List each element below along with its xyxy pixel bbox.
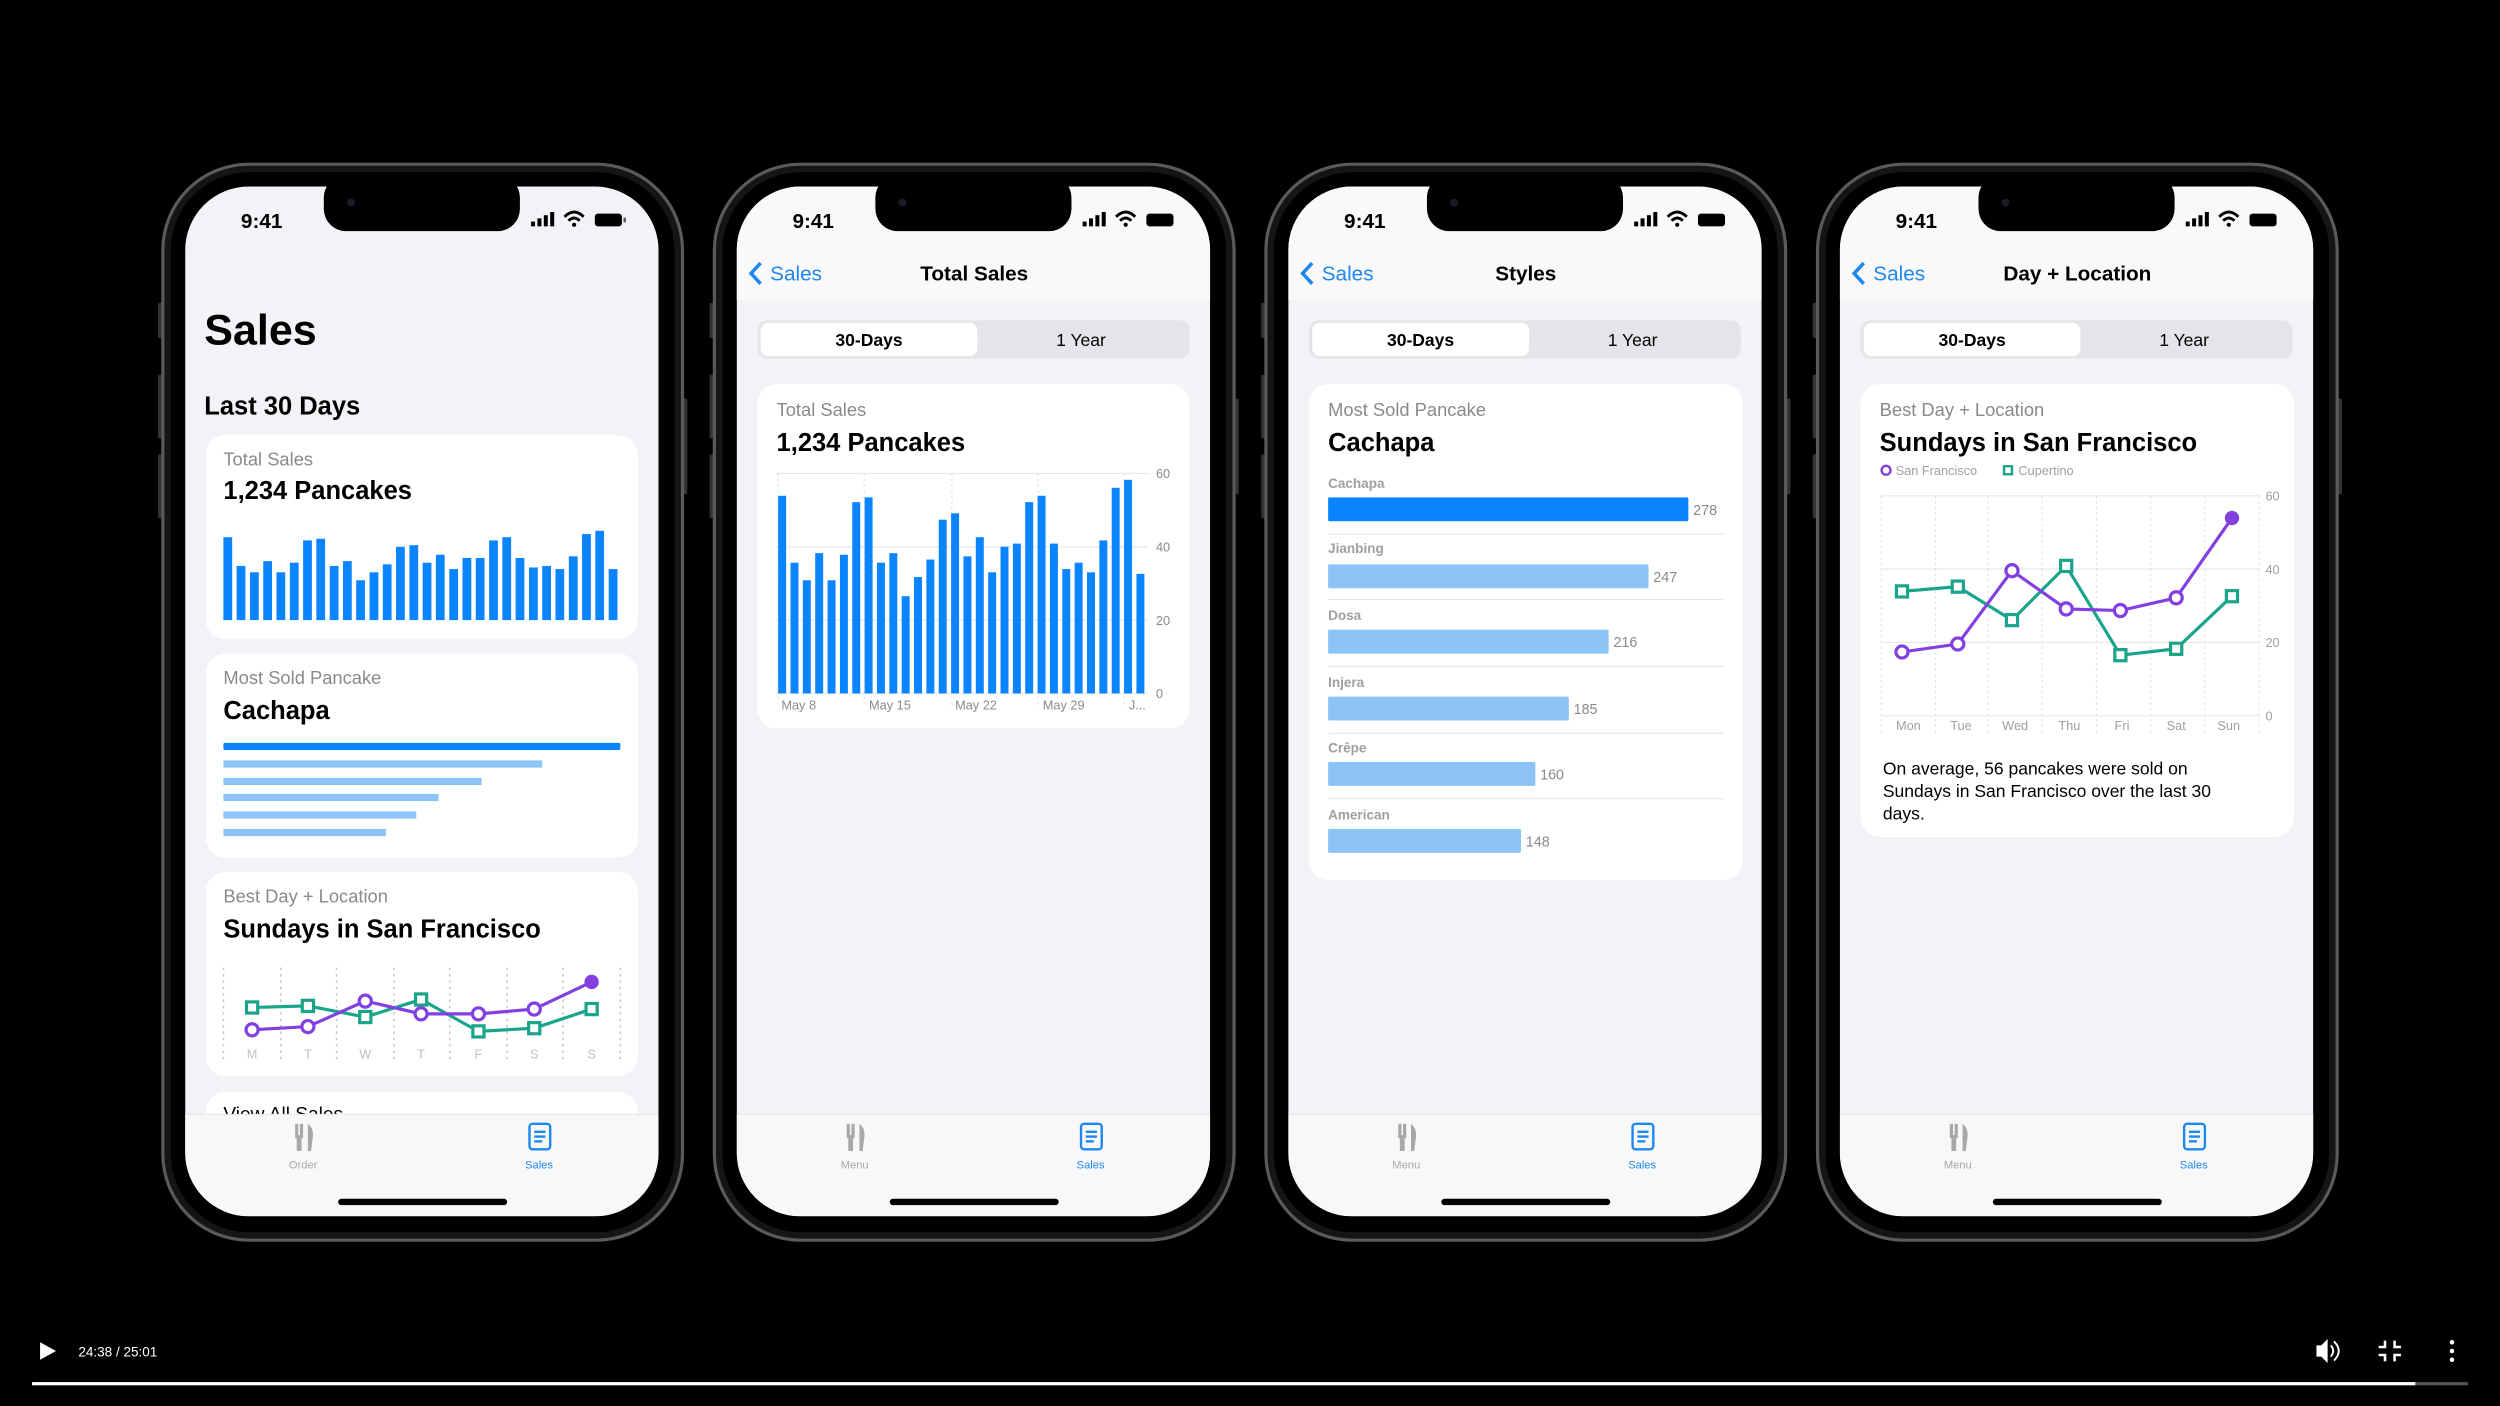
segmented control xyxy=(1861,320,2293,359)
bar chart: daily sales: 40 xyxy=(1156,540,1170,555)
legend xyxy=(1880,464,2073,478)
line chart mini xyxy=(223,968,620,1063)
line chart mini: F xyxy=(475,1046,483,1061)
nav bar: Sales xyxy=(1873,263,1925,286)
summary text xyxy=(1883,759,2211,823)
bar chart: daily sales: May 29 xyxy=(1043,697,1085,712)
segmented control: 30-Days xyxy=(835,330,903,350)
bar chart: daily sales: 20 xyxy=(1156,613,1170,628)
icon: exit fullscreen xyxy=(2379,1341,2401,1361)
status bar xyxy=(793,210,1174,228)
summary text: Sundays in San Francisco over the last 30 xyxy=(1883,781,2211,801)
phone 3: styles detail xyxy=(1261,164,1790,1240)
nav bar: Day + Location xyxy=(2003,263,2151,286)
nav bar xyxy=(1854,263,2151,286)
line chart: sales by day and location: 40 xyxy=(2265,562,2280,577)
tab bar xyxy=(1840,1114,2313,1216)
card: best day + location xyxy=(1861,384,2294,837)
summary text: days. xyxy=(1883,803,1925,823)
line chart mini: W xyxy=(359,1046,371,1061)
icon: play xyxy=(40,1342,56,1360)
tab bar: Sales xyxy=(525,1159,553,1171)
horizontal bar chart: styles: Cachapa xyxy=(1328,476,1385,491)
status bar xyxy=(1896,210,2277,228)
horizontal bar chart: styles: American xyxy=(1328,807,1390,822)
horizontal bar chart: styles: Injera xyxy=(1328,675,1365,690)
horizontal bar chart: styles: Dosa xyxy=(1328,608,1362,623)
line chart: sales by day and location: 20 xyxy=(2265,635,2280,650)
tab bar xyxy=(1288,1114,1762,1216)
bar chart: daily sales: J... xyxy=(1129,697,1146,712)
line chart mini: M xyxy=(247,1046,257,1061)
line chart: sales by day and location: Wed xyxy=(2002,718,2028,733)
segmented control: 1 Year xyxy=(1608,330,1658,350)
bar chart: daily sales xyxy=(777,466,1170,712)
bar chart: daily sales: May 15 xyxy=(869,697,911,712)
card: most sold pancake xyxy=(206,654,638,858)
status bar xyxy=(242,210,626,228)
card: most sold pancake styles xyxy=(1309,384,1743,880)
line chart: sales by day and location: Fri xyxy=(2115,718,2129,733)
horizontal bar chart: styles: 185 xyxy=(1574,702,1598,718)
tab bar: Menu xyxy=(1944,1159,1972,1171)
horizontal bar chart: styles: 160 xyxy=(1540,768,1564,784)
horizontal bar chart: styles: 148 xyxy=(1526,834,1550,850)
card: view all sales (cut off): View All Sales xyxy=(223,1105,343,1126)
icon: volume xyxy=(2316,1339,2339,1363)
horizontal bar chart: styles: Crêpe xyxy=(1328,740,1367,755)
phone 2: total sales detail xyxy=(710,164,1239,1240)
card: total sales chart: 1,234 Pancakes xyxy=(777,429,965,457)
card: view all sales (cut off) xyxy=(206,1092,638,1114)
card: total sales: 1,234 Pancakes xyxy=(223,477,412,505)
horizontal bar chart: styles: 247 xyxy=(1653,570,1677,586)
bar chart: daily sales: 0 xyxy=(1156,686,1163,701)
bar chart: daily sales: May 22 xyxy=(955,697,997,712)
phone 1: sales overview xyxy=(158,164,687,1240)
card: most sold pancake: Cachapa xyxy=(223,697,331,725)
bar chart: daily sales: May 8 xyxy=(781,697,816,712)
card: total sales chart xyxy=(757,384,1189,729)
segmented control: 1 Year xyxy=(2159,330,2209,350)
status bar: 9:41 xyxy=(1896,210,1937,233)
line chart mini: T xyxy=(304,1046,312,1061)
card: total sales xyxy=(206,435,638,639)
status bar: 9:41 xyxy=(241,210,282,233)
status bar xyxy=(1344,210,1726,228)
video controls xyxy=(32,1339,2468,1385)
nav bar: Styles xyxy=(1495,263,1556,286)
segmented control xyxy=(1309,320,1741,359)
nav bar: Sales xyxy=(1322,263,1374,286)
line chart: sales by day and location: 0 xyxy=(2265,709,2273,724)
icon: more menu xyxy=(2450,1340,2454,1362)
card: best day + location xyxy=(206,872,638,1076)
horizontal bar chart: styles: 278 xyxy=(1693,503,1717,519)
nav bar xyxy=(751,263,1028,286)
progress bar xyxy=(32,1382,2468,1385)
segmented control: 30-Days xyxy=(1939,330,2006,350)
card: best day + location: Best Day + Location xyxy=(223,885,388,906)
card: total sales chart: Total Sales xyxy=(777,399,866,420)
line chart: sales by day and location xyxy=(1881,489,2280,733)
card: best day + location: Best Day + Location xyxy=(1880,399,2044,420)
card: most sold pancake: Most Sold Pancake xyxy=(223,667,381,688)
tab bar: Order xyxy=(289,1159,318,1171)
line chart: sales by day and location: Mon xyxy=(1896,718,1921,733)
line chart: sales by day and location: Sat xyxy=(2167,718,2186,733)
heading: Sales: Sales xyxy=(204,306,317,354)
card: most sold pancake styles: Most Sold Pancake xyxy=(1328,399,1486,420)
legend: Cupertino xyxy=(2018,463,2074,478)
heading: Last 30 Days: Last 30 Days xyxy=(204,392,360,420)
horizontal bar chart: styles: Jianbing xyxy=(1328,541,1384,556)
timestamp: 24:38 / 25:01 xyxy=(78,1345,157,1360)
segmented control: 30-Days xyxy=(1387,330,1454,350)
legend: San Francisco xyxy=(1896,463,1977,478)
line chart mini: S xyxy=(587,1046,596,1061)
nav bar: Sales xyxy=(770,263,822,286)
summary text: On average, 56 pancakes were sold on xyxy=(1883,759,2188,779)
tab bar: Menu xyxy=(841,1159,869,1171)
horizontal bar chart: styles: 216 xyxy=(1613,635,1637,651)
line chart: sales by day and location: Sun xyxy=(2217,718,2240,733)
tab bar xyxy=(185,1114,659,1216)
card: most sold pancake styles: Cachapa xyxy=(1328,429,1435,457)
horizontal bar chart: styles xyxy=(1328,476,1723,853)
tab bar: Menu xyxy=(1392,1159,1420,1171)
tab bar: Sales xyxy=(1077,1159,1105,1171)
tab bar: Sales xyxy=(1628,1159,1657,1171)
bar chart: daily sales: 60 xyxy=(1156,466,1170,481)
card: total sales: Total Sales xyxy=(223,448,313,469)
status bar: 9:41 xyxy=(792,210,834,233)
tab bar xyxy=(737,1114,1210,1216)
nav bar xyxy=(1303,263,1556,286)
card: best day + location: Sundays in San Francisco xyxy=(1880,429,2197,457)
line chart: sales by day and location: Tue xyxy=(1950,718,1972,733)
segmented control xyxy=(757,320,1189,359)
status bar: 9:41 xyxy=(1344,210,1386,233)
tab bar: Sales xyxy=(2180,1159,2208,1171)
card: best day + location: Sundays in San Francisco xyxy=(223,915,541,943)
line chart mini: S xyxy=(530,1046,539,1061)
bar chart: daily sales mini xyxy=(223,531,617,620)
line chart mini: T xyxy=(417,1046,425,1061)
line chart: sales by day and location: Thu xyxy=(2058,718,2080,733)
bar chart: styles mini xyxy=(223,743,620,836)
line chart: sales by day and location: 60 xyxy=(2265,489,2280,504)
phone 4: day + location detail xyxy=(1813,164,2342,1240)
segmented control: 1 Year xyxy=(1056,330,1106,350)
nav bar: Total Sales xyxy=(920,263,1028,286)
